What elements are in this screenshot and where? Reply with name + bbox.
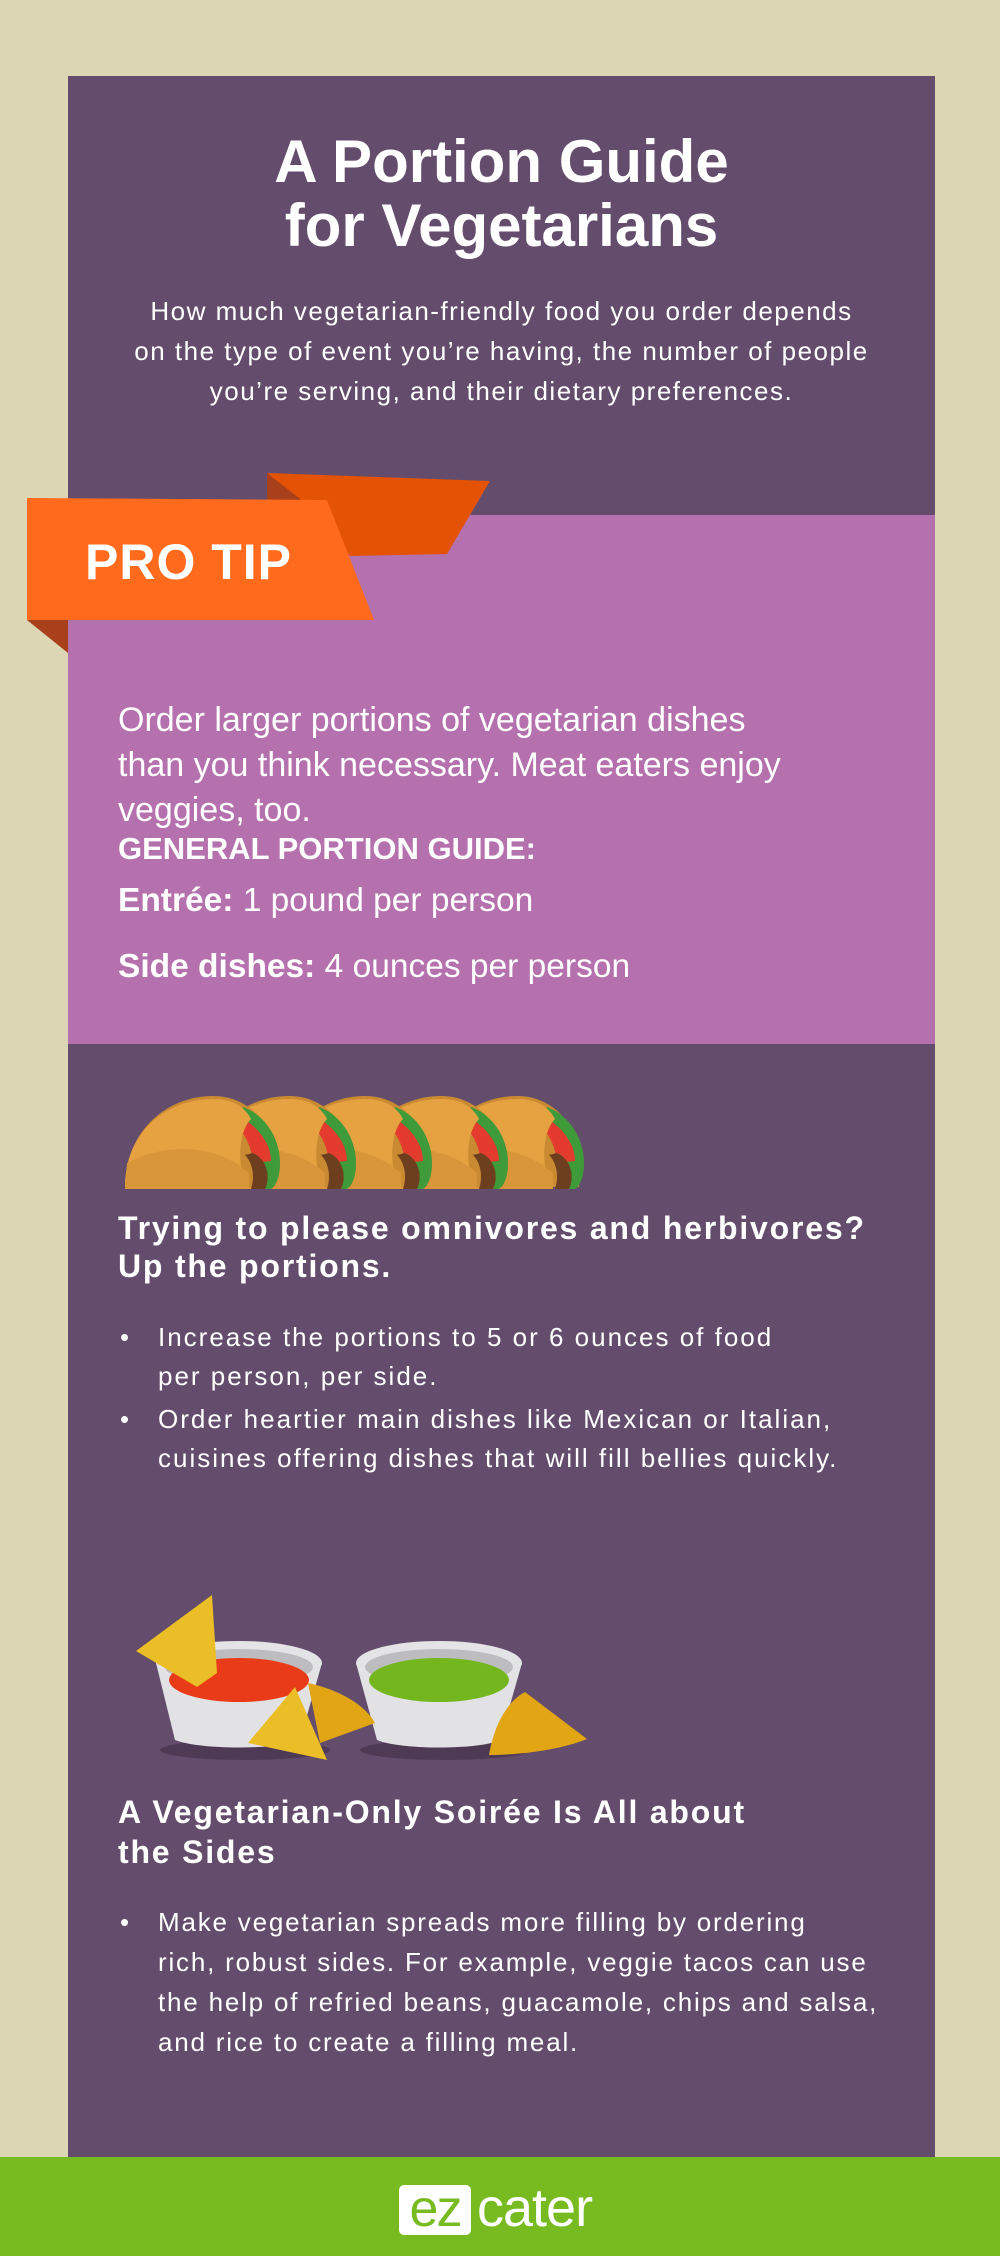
logo: ezcater bbox=[399, 2178, 592, 2238]
bullet: sides: and rice to create a filling meal. bbox=[158, 2027, 579, 2057]
entree portion: Entrée: 1 pound per person bbox=[118, 882, 533, 919]
pro tip body text: than you think necessary. Meat eaters enjoy bbox=[118, 746, 781, 784]
bullet: sides: Make vegetarian spreads more filling by ordering bbox=[158, 1907, 807, 1937]
intro text: How much vegetarian-friendly food you order depends bbox=[150, 296, 853, 326]
icon: row of tacos bbox=[125, 1096, 584, 1189]
pro tip label: PRO TIP bbox=[85, 534, 292, 590]
panel: pro tip bbox=[68, 515, 935, 1044]
bullet list: up the portions bbox=[120, 1322, 838, 1473]
bullet 2: • bbox=[120, 1404, 131, 1434]
heading: vegetarian-only soiree bbox=[118, 1794, 746, 1870]
bullet 1: per person, per side. bbox=[158, 1361, 438, 1391]
red bowl bbox=[156, 1663, 322, 1748]
bullet 1: • bbox=[120, 1322, 131, 1352]
intro text: you’re serving, and their dietary preferences. bbox=[210, 376, 793, 406]
pro tip body text bbox=[118, 701, 781, 829]
bullet: sides: rich, robust sides. For example, veggie tacos can use bbox=[158, 1947, 868, 1977]
heading: omnivores and herbivores bbox=[118, 1210, 866, 1284]
heading: vegetarian-only soiree: A Vegetarian-Only Soirée Is All about bbox=[118, 1794, 746, 1830]
general portion guide heading: GENERAL PORTION GUIDE: bbox=[118, 831, 536, 866]
heading: vegetarian-only soiree: the Sides bbox=[118, 1834, 276, 1870]
bullet 2 bbox=[120, 1404, 838, 1473]
green bowl bbox=[356, 1663, 522, 1748]
chips bbox=[136, 1595, 217, 1687]
bullet 1: Increase the portions to 5 or 6 ounces of food bbox=[158, 1322, 773, 1352]
bullet: sides bbox=[120, 1907, 878, 2057]
side dishes portion: Side dishes: 4 ounces per person bbox=[118, 948, 630, 985]
bullet: sides: • bbox=[120, 1907, 131, 1937]
intro text bbox=[134, 296, 869, 406]
pro tip ribbon bbox=[27, 473, 490, 653]
bullet: sides: the help of refried beans, guacamole, chips and salsa, bbox=[158, 1987, 878, 2017]
title: for Vegetarians bbox=[285, 192, 718, 259]
logo: ezcater: ez bbox=[410, 2180, 460, 2238]
title bbox=[274, 128, 729, 259]
heading: omnivores and herbivores: Trying to please omnivores and herbivores? bbox=[118, 1210, 866, 1246]
bullet 2: Order heartier main dishes like Mexican or Italian, bbox=[158, 1404, 832, 1434]
pro tip body text: veggies, too. bbox=[118, 791, 311, 829]
bullet 2: cuisines offering dishes that will fill bellies quickly. bbox=[158, 1443, 838, 1473]
icon: salsa and guacamole with chips bbox=[136, 1595, 587, 1760]
bullet 1 bbox=[120, 1322, 773, 1391]
footer bbox=[0, 2157, 1000, 2256]
logo: ezcater: cater bbox=[477, 2178, 592, 2238]
title: A Portion Guide bbox=[274, 128, 729, 195]
pro tip body text: Order larger portions of vegetarian dishes bbox=[118, 701, 745, 739]
heading: omnivores and herbivores: Up the portions. bbox=[118, 1248, 392, 1284]
intro text: on the type of event you’re having, the number of people bbox=[134, 336, 869, 366]
